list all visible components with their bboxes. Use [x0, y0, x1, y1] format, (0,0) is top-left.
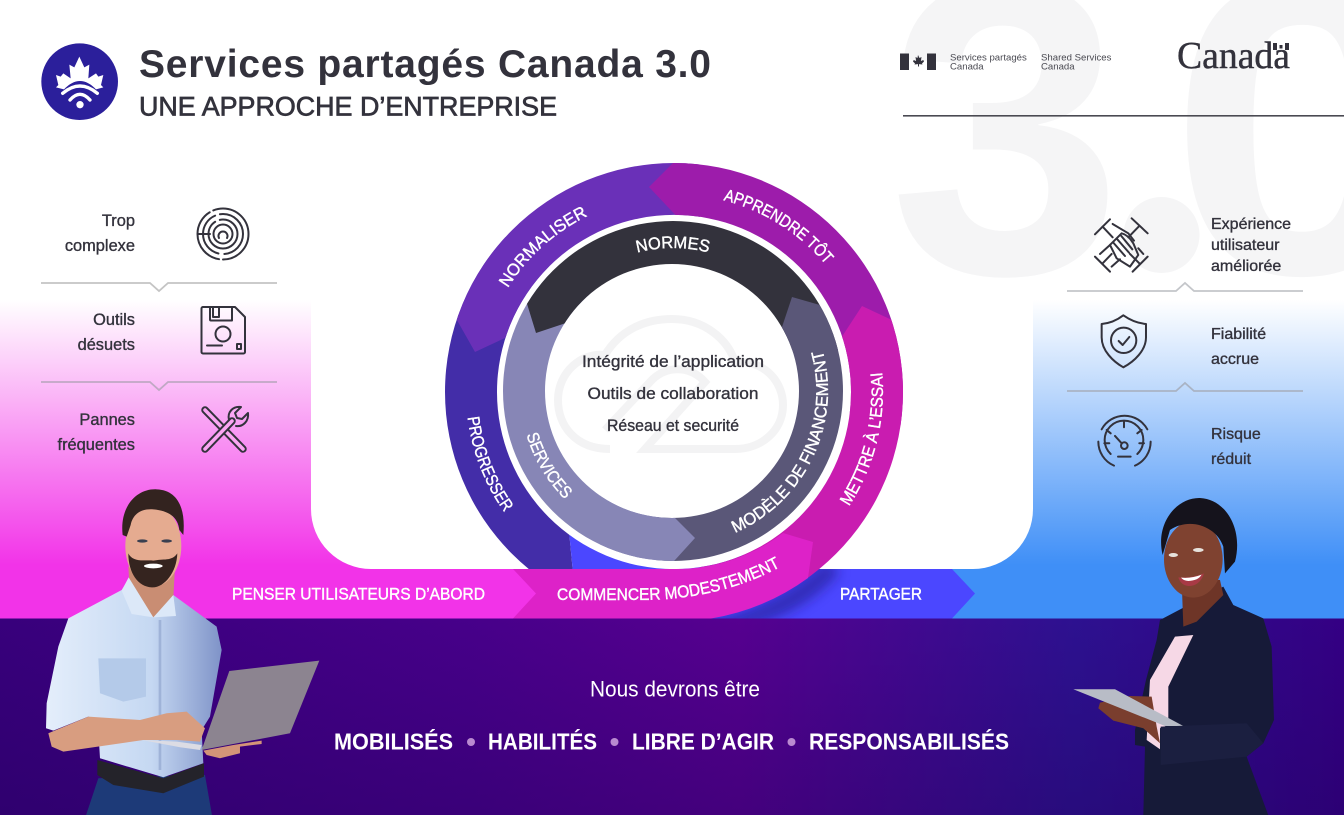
label: Risque réduit: réduit	[1211, 451, 1252, 468]
inner cycle ring	[503, 221, 843, 561]
label: Outils désuets: désuets	[78, 336, 135, 354]
icon: tools	[205, 407, 248, 449]
values: HABILITÉS	[488, 728, 597, 754]
label: COMMENCER MODESTEMENT: COMMENCER MODESTEMENT	[558, 556, 778, 600]
government signature: Canada	[1041, 62, 1075, 72]
white central panel	[311, 0, 1033, 569]
lead-in text: Nous devrons être	[590, 676, 760, 702]
divider 2	[41, 382, 277, 390]
label: Fiabilité accrue: Fiabilité	[1211, 326, 1266, 343]
divider 4	[1067, 383, 1303, 391]
arrow band: PARTAGER	[712, 569, 975, 618]
label: Trop complexe: complexe	[65, 237, 135, 255]
ghost cloud	[558, 319, 783, 449]
icon: shield	[1102, 315, 1146, 367]
label: MODÈLE DE FINANCEMENT: MODÈLE DE FINANCEMENT	[730, 352, 828, 533]
government signature	[900, 52, 1112, 72]
white gap disc	[496, 214, 852, 570]
divider 1	[41, 283, 277, 291]
label: Expérience utilisateur améliorée: améliorée	[1211, 258, 1281, 275]
label: NORMES: NORMES	[636, 236, 710, 252]
man with laptop	[46, 489, 319, 815]
woman with tablet	[1073, 498, 1274, 815]
label: Expérience utilisateur améliorée: Expérience	[1211, 216, 1291, 233]
segments	[503, 221, 843, 561]
centre text: Intégrité de l’application	[582, 353, 764, 371]
icon: floppy disk	[202, 307, 245, 354]
values	[334, 728, 1009, 754]
background: right blue gradient	[672, 0, 1344, 620]
label: SERVICES: SERVICES	[527, 432, 572, 498]
right list	[1067, 216, 1303, 468]
government signature: Services partagés	[950, 52, 1027, 64]
watermark 3.0	[889, 0, 1344, 363]
icon: maze	[198, 208, 248, 260]
subtitle: UNE APPROCHE D’ENTREPRISE	[139, 92, 557, 122]
divider 3	[1067, 283, 1303, 291]
centre text: Outils de collaboration	[588, 385, 758, 403]
centre text: Réseau et securité	[607, 417, 739, 435]
bottom purple panel	[0, 618, 1344, 815]
title: Services partagés Canada 3.0	[139, 43, 711, 86]
header logo	[41, 43, 118, 120]
label: Risque réduit: Risque	[1211, 426, 1261, 443]
arrow band label: PENSER UTILISATEURS D'ABORD: PENSER UTILISATEURS D’ABORD	[232, 584, 485, 604]
values: RESPONSABILISÉS	[809, 728, 1009, 754]
label: APPRENDRE TÔT: APPRENDRE TÔT	[723, 190, 834, 262]
label: NORMALISER: NORMALISER	[498, 207, 588, 288]
label: Trop complexe: Trop	[102, 212, 135, 230]
government signature: Canada	[950, 62, 984, 72]
icon: gauge	[1098, 416, 1151, 466]
centre text	[582, 353, 764, 435]
label: Pannes fréquentes: fréquentes	[58, 436, 135, 454]
values: MOBILISÉS	[334, 728, 453, 754]
icon: joined hands	[1095, 218, 1148, 272]
label: Fiabilité accrue: accrue	[1211, 351, 1259, 368]
background: left magenta gradient	[0, 0, 672, 620]
label: Expérience utilisateur améliorée: utilisateur	[1211, 237, 1280, 254]
label: PROGRESSER: PROGRESSER	[468, 416, 513, 512]
left list	[41, 208, 277, 454]
Canada wordmark: Canada	[1177, 35, 1290, 77]
outer cycle ring	[445, 163, 903, 618]
government signature: Shared Services	[1041, 52, 1112, 64]
arrow band: PARTAGER: PARTAGER	[840, 584, 922, 604]
label: METTRE À L'ESSAI: METTRE À L’ESSAI	[840, 373, 884, 506]
label: Outils désuets: Outils	[93, 311, 135, 329]
segment: COMMENCER MODESTEMENT arrow	[513, 533, 813, 618]
values: LIBRE D’AGIR	[632, 728, 774, 754]
segments	[445, 163, 903, 578]
label: Pannes fréquentes: Pannes	[79, 411, 135, 429]
